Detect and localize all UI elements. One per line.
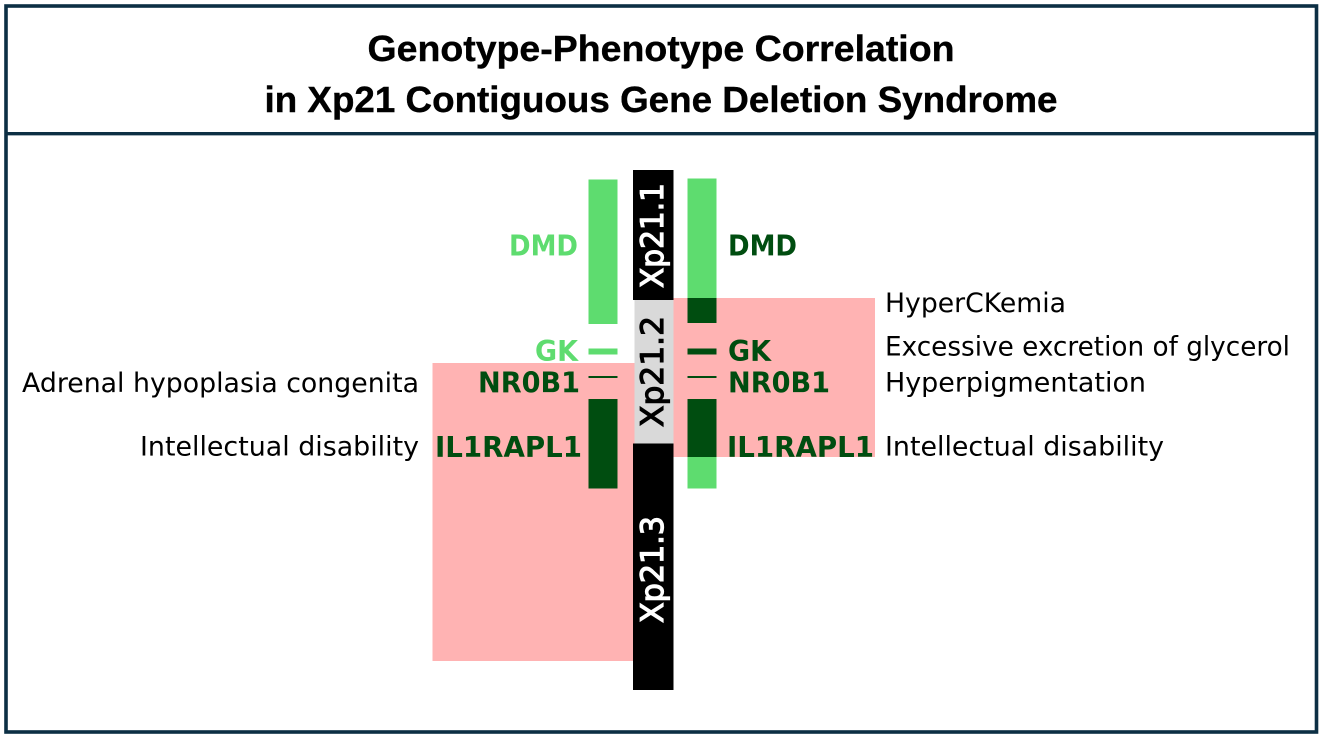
left gene labels: IL1RAPL1 <box>435 431 582 464</box>
right phenotype labels <box>885 288 1290 462</box>
bar: GK right <box>688 348 716 354</box>
bar: DMD left <box>588 180 618 324</box>
left phenotype labels: Intellectual disability <box>140 432 419 462</box>
right gene bars <box>688 178 716 488</box>
panel: phenotype region right <box>673 298 875 457</box>
right gene labels: IL1RAPL1 <box>727 431 874 464</box>
left gene labels: DMD <box>509 230 578 262</box>
left gene bars <box>588 180 618 488</box>
title: Genotype-Phenotype Correlation <box>368 28 954 69</box>
right phenotype labels: Hyperpigmentation <box>885 368 1146 398</box>
left gene labels: GK <box>535 335 579 368</box>
right gene labels <box>727 230 874 464</box>
band Xp21.3: Xp21.3 <box>635 516 671 623</box>
bar: IL1RAPL1 right <box>688 399 716 488</box>
right phenotype labels: Excessive excretion of glycerol <box>885 332 1290 362</box>
right gene labels: NR0B1 <box>728 366 830 400</box>
left gene labels: NR0B1 <box>478 366 580 400</box>
left gene labels <box>435 230 582 464</box>
band Xp21.2: Xp21.2 <box>635 316 671 427</box>
chromosome ideogram <box>633 170 674 690</box>
title <box>264 28 1058 120</box>
band Xp21.1: Xp21.1 <box>635 183 671 288</box>
left phenotype labels <box>22 368 419 462</box>
right phenotype labels: HyperCKemia <box>885 288 1066 319</box>
bar: GK left <box>588 348 618 354</box>
left phenotype labels: Adrenal hypoplasia congenita <box>22 368 419 399</box>
right phenotype labels: Intellectual disability <box>885 432 1164 462</box>
band Xp21.3 <box>633 444 674 690</box>
right gene labels: DMD <box>728 230 797 262</box>
bar: NR0B1 left <box>588 376 618 378</box>
right gene labels: GK <box>728 335 772 368</box>
bar: DMD right <box>688 178 716 323</box>
bar: NR0B1 right <box>688 376 716 378</box>
bar: IL1RAPL1 left <box>588 399 618 488</box>
panel: phenotype region left <box>432 363 634 661</box>
title: in Xp21 Contiguous Gene Deletion Syndrome <box>264 79 1058 120</box>
